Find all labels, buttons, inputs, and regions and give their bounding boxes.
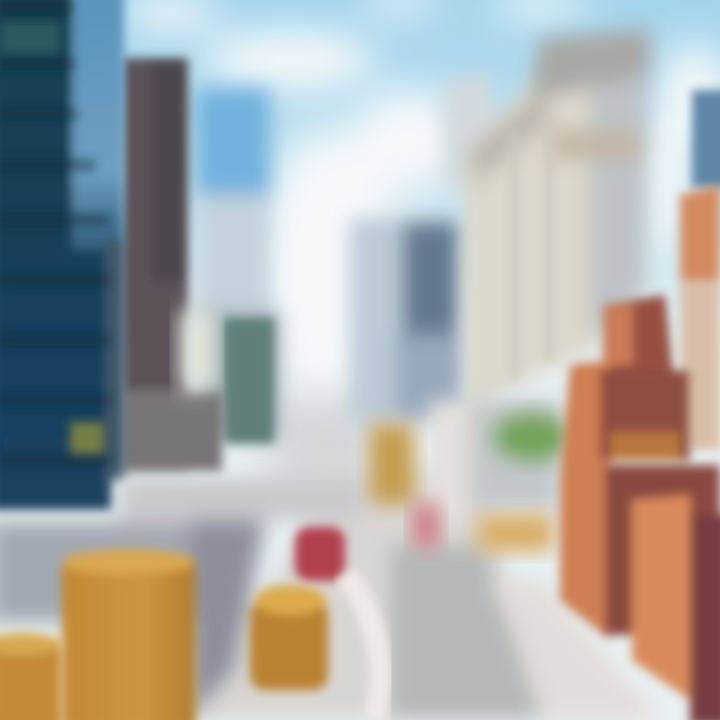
coin stack: centre <box>250 585 328 690</box>
building: dark brown tower <box>122 58 222 473</box>
building: far right blue tower <box>692 90 720 188</box>
clouds <box>120 0 720 390</box>
small pale block <box>180 310 214 390</box>
yellow taxi <box>478 514 554 552</box>
ground: road and pavements <box>0 400 660 720</box>
building: dark glass skyscraper <box>0 0 125 510</box>
building: central blue-grey block <box>350 218 465 423</box>
tree <box>494 413 570 461</box>
distant yellow vehicle <box>370 424 414 504</box>
distant street haze <box>270 400 380 490</box>
building: green-grey block <box>224 318 274 443</box>
coin stack: large <box>62 549 196 720</box>
brick buildings <box>560 185 720 720</box>
red car <box>295 527 345 581</box>
building: blue and grey tower <box>190 88 280 440</box>
building: large cream office block <box>442 28 650 410</box>
distant red vehicle <box>412 504 440 548</box>
coin stack: small left <box>0 633 62 720</box>
kerb line <box>345 575 381 720</box>
